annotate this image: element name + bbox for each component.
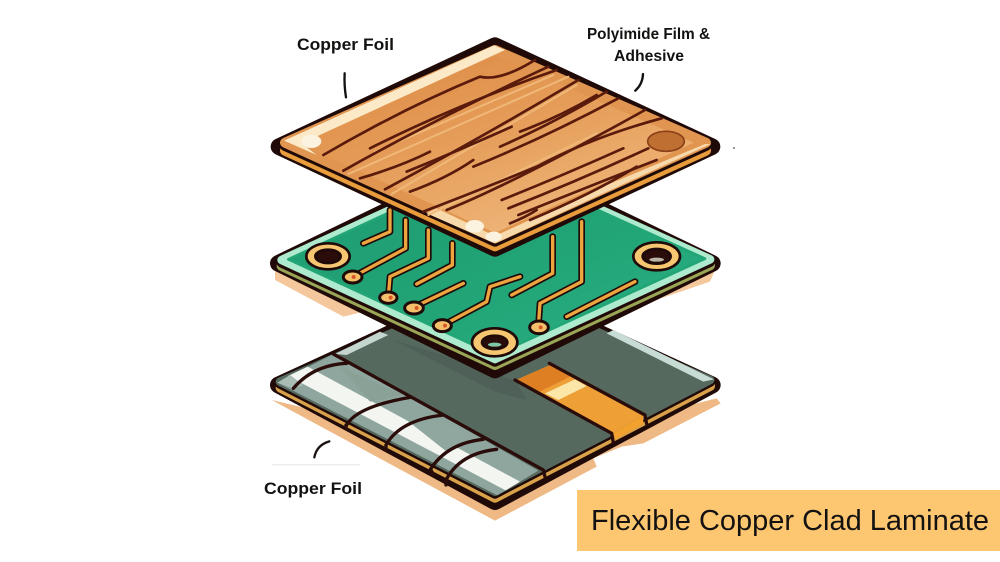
label: polyimide film and adhesive xyxy=(587,26,710,65)
copper grain highlights xyxy=(348,75,597,215)
cream highlights xyxy=(284,45,505,155)
dividing lines xyxy=(293,354,647,485)
top layer body xyxy=(279,46,712,248)
title box xyxy=(577,490,1000,551)
middle layer body xyxy=(278,158,712,370)
speck xyxy=(733,147,735,149)
middle layer shadow xyxy=(275,263,715,317)
middle layer surface mint rim xyxy=(282,162,710,359)
faint erased text remnant xyxy=(272,464,360,466)
wood-like grain lines xyxy=(323,60,662,223)
middle layer edge xyxy=(282,168,710,365)
spots xyxy=(301,135,321,148)
shadow of board above xyxy=(393,340,527,400)
leader: polyimide xyxy=(635,74,643,91)
light edge highlights xyxy=(335,332,388,355)
trace pads xyxy=(343,271,548,334)
leader: copper foil top xyxy=(344,73,346,97)
layer: bottom copper foil xyxy=(272,285,721,521)
top layer surface xyxy=(285,50,706,238)
mounting holes xyxy=(306,242,680,356)
layer: middle circuit board xyxy=(275,158,715,370)
orange polyimide strip xyxy=(516,365,643,433)
label: polyimide film and adhesive: Polyimide Film & xyxy=(587,26,710,43)
bottom layer edge line xyxy=(280,290,710,494)
copper traces xyxy=(353,210,635,327)
label: polyimide film and adhesive: Adhesive xyxy=(614,48,684,65)
title box: Flexible Copper Clad Laminate xyxy=(591,505,989,537)
label: copper foil top: Copper Foil xyxy=(297,35,394,54)
metallic foil strip xyxy=(277,354,538,495)
top layer orange edge xyxy=(285,58,706,246)
top layer edge line xyxy=(285,53,706,242)
bottom layer edge xyxy=(281,294,710,498)
layer: top copper foil xyxy=(279,45,712,248)
bottom layer body xyxy=(278,285,712,502)
label: copper foil bottom: Copper Foil xyxy=(264,479,362,498)
bottom layer shadow xyxy=(272,398,721,521)
bottom layer surface xyxy=(280,288,710,492)
leader: bottom foil xyxy=(314,441,329,457)
middle layer edge line xyxy=(282,164,710,362)
middle layer surface xyxy=(288,163,705,355)
